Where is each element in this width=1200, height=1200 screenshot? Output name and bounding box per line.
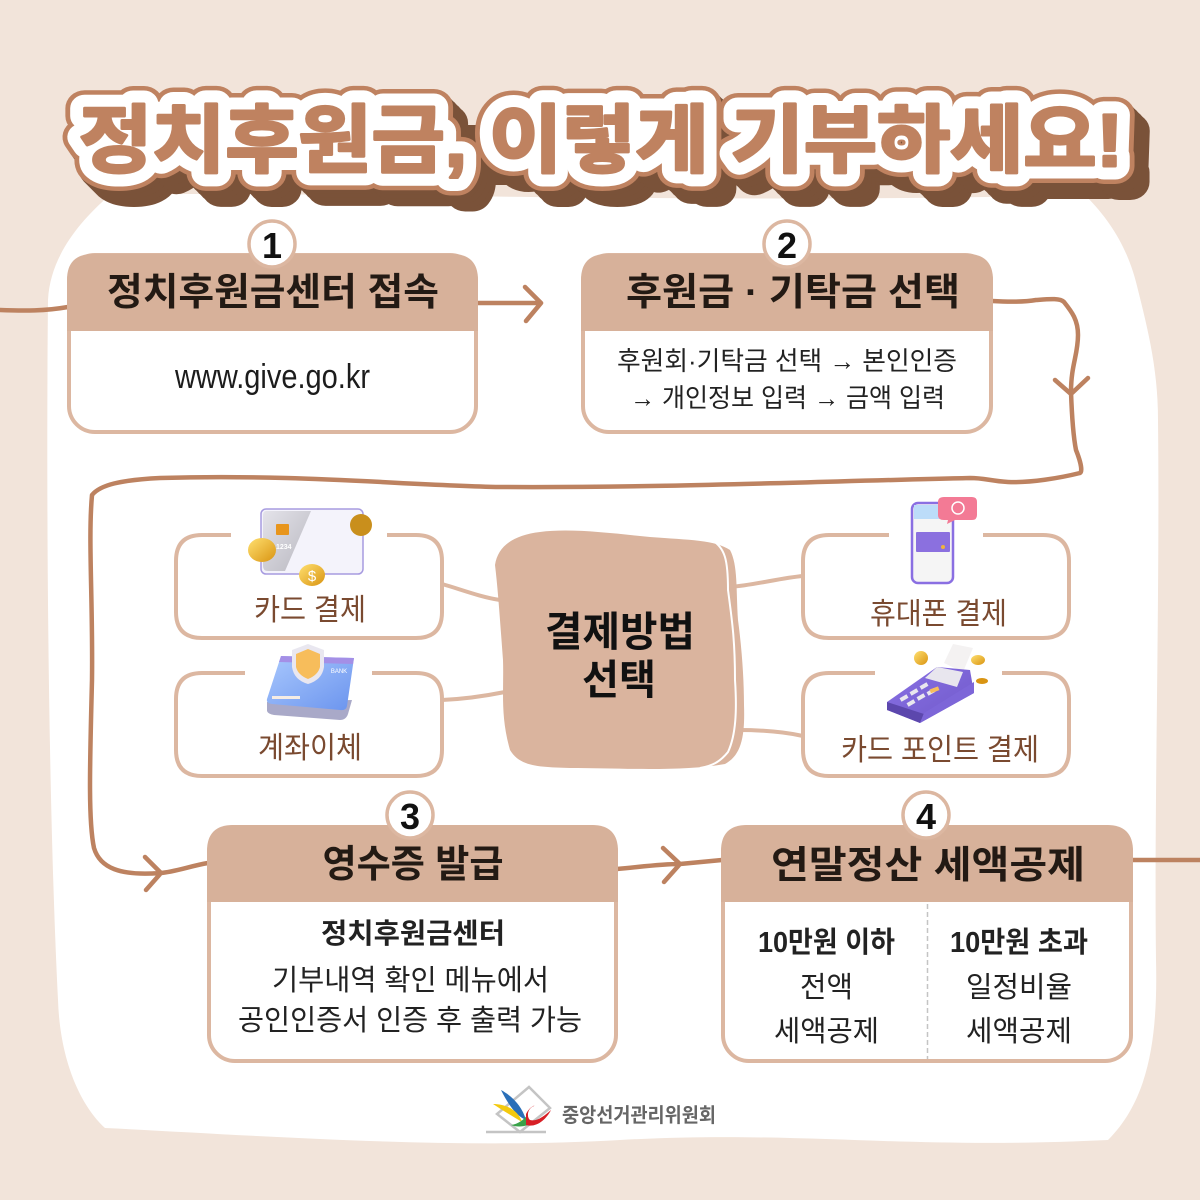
- arrow: step 3 to step 4: [617, 848, 722, 882]
- box outline: [723, 827, 1131, 1061]
- icon: credit card with coins: $: [308, 568, 317, 585]
- panel: card point payment: [803, 644, 1069, 776]
- panel: mobile payment: [803, 497, 1069, 638]
- heading: 연말정산 세액공제: [771, 845, 1085, 887]
- label: 카드 포인트 결제: [841, 734, 1039, 767]
- panel: step 3: [207, 792, 618, 1061]
- left column: 전액: [800, 972, 853, 1004]
- right column: [950, 926, 1088, 1048]
- label: 휴대폰 결제: [870, 598, 1007, 631]
- body line 2: → 개인정보 입력 → 금액 입력: [630, 383, 945, 413]
- box header: [67, 254, 478, 331]
- panel: bank transfer: [176, 644, 442, 776]
- arrow: step 2 to step 3: [90, 299, 1088, 890]
- flow arrows: [0, 287, 1200, 890]
- title outer outline: 정치후원금, 이렇게 기부하세요!: [79, 99, 1123, 182]
- box outline: [803, 535, 1069, 638]
- number badge: 4: [916, 796, 936, 837]
- title white outline: 정치후원금, 이렇게 기부하세요!: [79, 99, 1123, 182]
- panel: card payment: [176, 509, 442, 638]
- box header: [581, 254, 993, 331]
- left column: [758, 926, 895, 1048]
- title: [79, 99, 1138, 198]
- label: 계좌이체: [258, 732, 362, 765]
- panel: step 1: [67, 221, 478, 432]
- box header: [207, 825, 618, 902]
- heading: 영수증 발급: [322, 844, 504, 886]
- panel: step 2: [581, 221, 993, 432]
- title extrude shadow: 정치후원금, 이렇게 기부하세요!: [82, 103, 1126, 186]
- icon: ballot bird: [486, 1087, 551, 1132]
- rim highlight: [700, 540, 736, 768]
- title extrude shadow: 정치후원금, 이렇게 기부하세요!: [90, 111, 1134, 194]
- box outline: [803, 673, 1069, 776]
- connector lines: [442, 576, 803, 736]
- title fill: 정치후원금, 이렇게 기부하세요!: [79, 99, 1123, 182]
- left column: 10만원 이하: [758, 926, 895, 959]
- url text: www.give.go.kr: [174, 358, 370, 396]
- number badge: [387, 792, 433, 838]
- center blob: [495, 531, 744, 769]
- arrow: step 1 to step 2: [477, 287, 541, 321]
- box outline: [209, 827, 616, 1061]
- panel: step 4: [721, 792, 1133, 1061]
- icon: bank book with shield: [267, 644, 354, 720]
- right column: 10만원 초과: [950, 926, 1088, 959]
- box outline: [176, 535, 442, 638]
- heading: 정치후원금센터 접속: [107, 272, 439, 314]
- icon: phone with face id bubble: [912, 497, 977, 583]
- arrow: entry to step 1: [0, 307, 68, 311]
- box outline: [583, 255, 991, 432]
- number badge: [249, 221, 295, 267]
- number badge: [903, 792, 949, 838]
- number badge: 2: [777, 225, 797, 266]
- left column: 세액공제: [774, 1016, 879, 1048]
- box outline: [176, 673, 442, 776]
- box header: [721, 825, 1133, 902]
- arrow: exit from step 4: [1132, 858, 1200, 862]
- heading: 결제방법: [545, 609, 695, 655]
- body line 1: 후원회·기탁금 선택 → 본인인증: [617, 346, 957, 376]
- right column: 세액공제: [966, 1016, 1072, 1048]
- icon: bank book with shield: BANK: [331, 669, 347, 675]
- icon: credit card with coins: 1234: [276, 544, 292, 551]
- logo: national election commission: [486, 1087, 716, 1132]
- heading line 2: 선택: [582, 657, 656, 703]
- icon: card terminal: [887, 644, 988, 723]
- number badge: 3: [400, 796, 420, 837]
- number badge: 1: [262, 225, 282, 266]
- panel: center payment method: [495, 531, 744, 769]
- icon: credit card with coins: [248, 509, 372, 586]
- body line 3: 공인인증서 인증 후 출력 가능: [238, 1004, 582, 1037]
- title extrude shadow: 정치후원금, 이렇게 기부하세요!: [86, 107, 1130, 190]
- body bold line: 정치후원금센터: [321, 918, 505, 949]
- label: 카드 결제: [254, 594, 366, 627]
- right column: 일정비율: [966, 972, 1072, 1004]
- white blob panel: [47, 194, 1158, 1143]
- heading: 후원금 · 기탁금 선택: [626, 272, 960, 314]
- number badge: [764, 221, 810, 267]
- body line 2: 기부내역 확인 메뉴에서: [272, 964, 549, 997]
- box outline: [69, 255, 476, 432]
- title extrude shadow: 정치후원금, 이렇게 기부하세요!: [94, 115, 1138, 198]
- organization name: 중앙선거관리위원회: [562, 1104, 716, 1127]
